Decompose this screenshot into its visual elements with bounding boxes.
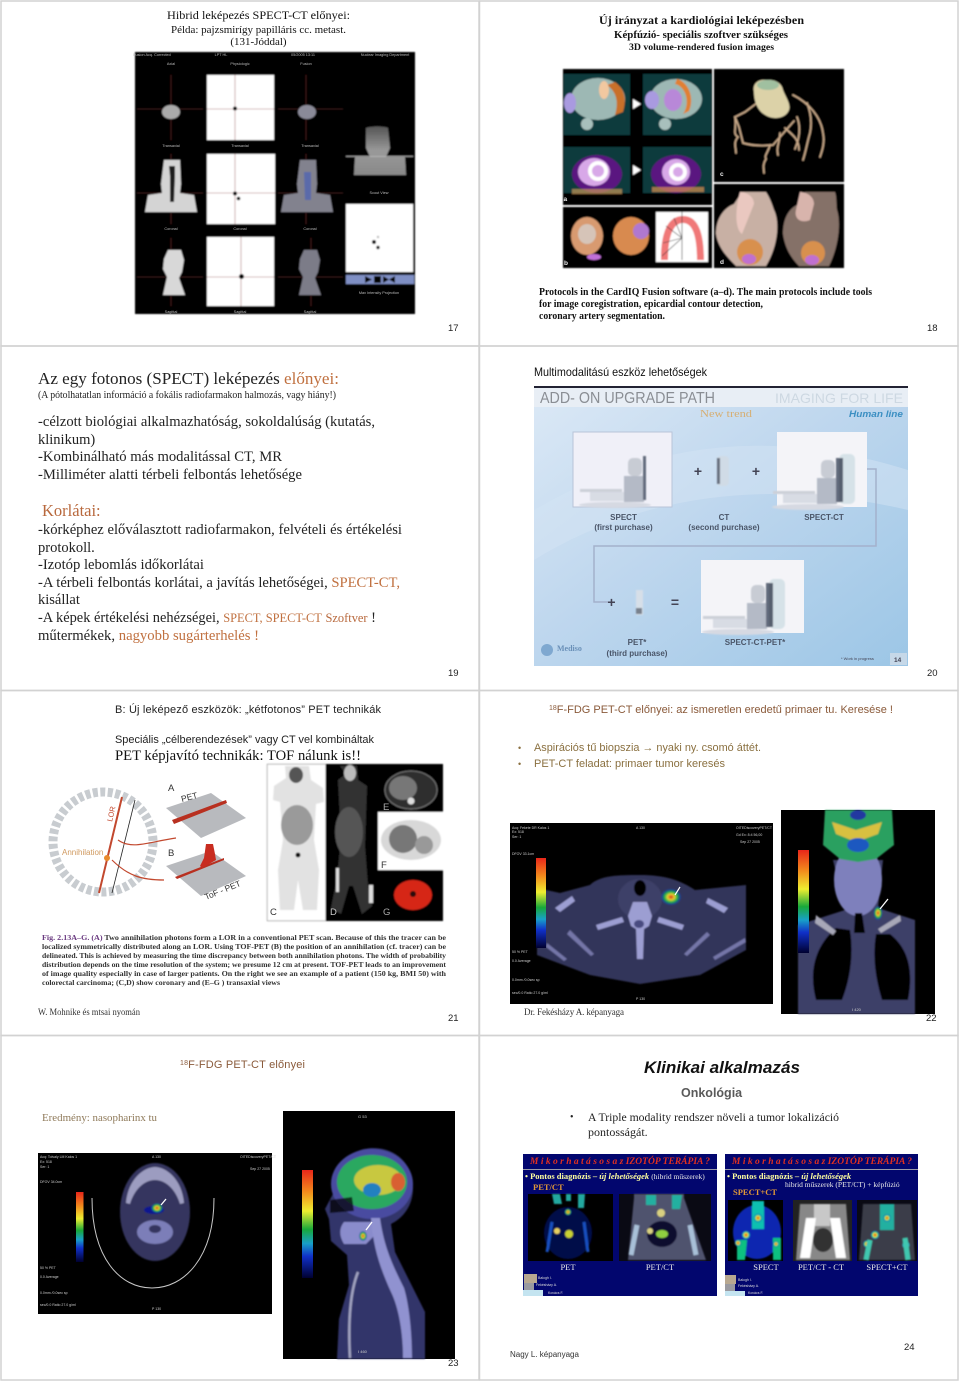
- caption: slide 18: [539, 287, 872, 322]
- image: axial head PET-CT: Acq: Tolvaly LM Kalos 1: [40, 1155, 77, 1159]
- image labels on screen: Scout View: [370, 191, 389, 195]
- slide image: PET/CT therapy: PET/CT: [646, 1262, 675, 1272]
- page number 18: 18: [927, 323, 938, 334]
- page number 17: 17: [448, 323, 459, 334]
- product labels: (first purchase): [594, 523, 653, 532]
- product labels: SPECT: [610, 513, 637, 522]
- slide image: PET/CT therapy: PET: [560, 1262, 576, 1272]
- image labels on screen: Coronal: [233, 227, 247, 231]
- plus and equals signs: [607, 463, 760, 610]
- image: fusion panels: [563, 69, 844, 268]
- text block: limitations: protokoll.: [38, 540, 95, 556]
- result text: Eredmény: nasopharinx tu: [42, 1112, 157, 1124]
- image: add-on upgrade path: IMAGING FOR LIFE: [775, 390, 903, 406]
- image labels on screen: Transaxial: [301, 144, 319, 148]
- bullet text: A Triple modality rendszer növeli a tumor lokalizáció: [588, 1110, 839, 1124]
- panel: slide 22 FDG PET-CT: [510, 704, 937, 1024]
- image labels on screen: Coronal: [164, 227, 178, 231]
- image labels on screen: Coronal: [303, 227, 317, 231]
- heading: slide 20: Multimodalitású eszköz lehetőségek: [534, 365, 708, 379]
- header labels: ADD- ON UPGRADE PATH: [540, 390, 715, 407]
- image labels on screen: Sagittal: [304, 310, 316, 314]
- page number 22: 22: [926, 1013, 937, 1024]
- image: add-on upgrade path: New trend: [700, 409, 753, 420]
- image: axial head PET-CT: [38, 1153, 277, 1314]
- image: axial PET-CT neck: DFOV 33.1cm: [512, 852, 534, 856]
- image: axial PET-CT neck: Ex: 518: [512, 830, 524, 834]
- heading: slide 18: 3D volume-rendered fusion images: [629, 43, 774, 53]
- subheading: TOF: PET képjavító technikák: TOF nálunk is!!: [115, 748, 361, 764]
- product boxes: [573, 432, 672, 507]
- panel letters: a: [564, 196, 568, 203]
- image labels on screen: Nuclear Imaging Department: [361, 53, 410, 57]
- plus and equals signs: +: [752, 463, 760, 479]
- panel d: [716, 192, 839, 266]
- heading: slide 18: Képfúzió- speciális szoftver szükséges: [614, 30, 788, 41]
- image: SPECT-CT screen: [135, 52, 415, 314]
- image: axial PET-CT neck: 50 % PET: [512, 950, 529, 954]
- diagram: TOF-PET ring: ToF - PET: [203, 878, 242, 902]
- image: sagittal head PET-CT: I 460: [358, 1349, 368, 1354]
- transversal slices: [162, 105, 180, 119]
- bullet list: slide 22: [518, 742, 761, 770]
- image: axial head PET-CT: 0.0 Average: [40, 1275, 59, 1279]
- image labels on screen: Axial: [167, 62, 175, 66]
- source note: slide 21: W. Mohnike és mtsai nyomán: [38, 1007, 140, 1017]
- image labels on screen: Max Intensity Projection: [359, 291, 399, 295]
- bullet list: slide 22: •: [518, 759, 521, 769]
- image labels on screen: Transaxial: [162, 144, 180, 148]
- heading: slide 22: F-FDG PET-CT előnyei: az ismeretlen eredetű primaer tu. Keresése !: [557, 704, 893, 716]
- source note: slide 22: Dr. Fekésházy A. képanyaga: [524, 1007, 624, 1017]
- image: axial PET-CT neck: Acq: Fekete DR Kalos 1: [512, 826, 549, 830]
- slide image: PET/CT therapy: [523, 1154, 717, 1296]
- heading: slide 21: B: Új leképező eszközök: „kétfotonos” PET technikák: [115, 703, 382, 716]
- bullet list: slide 22: Aspirációs tű biopszia → nyaki ny. csomó áttét.: [534, 742, 761, 754]
- subheading: slide 21: Speciális „célberendezések” vagy CT vel kombináltak: [115, 734, 374, 746]
- caption: figure 2.13: distribution depends on the time resolution of the system; we presume 12 cm at present. TOF-PET leads to an improvement: [42, 960, 447, 969]
- slide image: PET/CT therapy: • Pontos diagnózis – új lehetőségek (hibrid műszerek): [525, 1171, 705, 1181]
- heading: slide 23: 18: [180, 1060, 188, 1067]
- slide image: SPECT+CT therapy: SPECT: [753, 1262, 780, 1272]
- image: coronal PET-CT: [781, 810, 935, 1014]
- text block: limitations: kisállat: [38, 592, 80, 608]
- image: axial head PET-CT: 50 % PET: [40, 1266, 57, 1270]
- image: axial head PET-CT: Sep 27 2005: [250, 1167, 270, 1171]
- slide image: SPECT+CT therapy: M i k o r h a t á s o s a z IZOTÓP TERÁPIA ?: [731, 1155, 912, 1167]
- heading: slide 24: Klinikai alkalmazás: [644, 1058, 800, 1077]
- bullet list: slide 22: PET-CT feladat: primaer tumor keresés: [534, 758, 725, 770]
- text block: limitations: -Izotóp lebomlás időkorlátai: [38, 557, 204, 573]
- image letters: D: [330, 907, 337, 918]
- diagram: TOF-PET ring: B: [168, 848, 174, 859]
- panel: slide 24 clinical use: [510, 1058, 918, 1359]
- image: axial PET-CT neck: Sep 27 2005: [740, 840, 760, 844]
- image: axial PET-CT neck: P 130: [636, 997, 645, 1001]
- image letters: [270, 802, 390, 918]
- caption: slide 18: for image coregistration, epicardial contour detection,: [539, 299, 763, 310]
- caption: figure 2.13: of image quality especially in case of larger patients. On the right we see an example of a patient (150 kg, BMI 50) with: [42, 969, 447, 978]
- page number 23: 23: [448, 1358, 459, 1369]
- slide image: SPECT+CT therapy: SPECT+CT: [733, 1187, 777, 1197]
- bullet text: pontosságát.: [588, 1125, 648, 1139]
- plus and equals signs: =: [671, 594, 679, 610]
- panel: slide 18 cardiology: [539, 13, 938, 334]
- panel a: [564, 74, 711, 194]
- image: add-on upgrade path: Human line: [849, 409, 903, 419]
- page number 20: 20: [927, 668, 938, 679]
- text block: limitations: műtermékek, nagyobb sugárterhelés !: [38, 628, 259, 644]
- heading: slide 17: (131-Jóddal): [230, 36, 287, 48]
- product labels: (third purchase): [607, 649, 668, 658]
- diagram: TOF-PET ring: Annihilation: [62, 848, 103, 857]
- panel: slide 20 multimodality: [534, 365, 938, 679]
- slide image: PET/CT therapy: M i k o r h a t á s o s a z IZOTÓP TERÁPIA ?: [529, 1155, 710, 1167]
- subheading: oncology: Onkológia: [681, 1086, 743, 1100]
- image labels on screen: Fusion: [300, 62, 312, 66]
- image letters: G: [383, 907, 390, 918]
- image: axial head PET-CT: Ex: 518: [40, 1160, 52, 1164]
- image: axial PET-CT neck: OITEDiscoveryPET/CT: [736, 826, 773, 830]
- logo: Mediso: [541, 644, 582, 656]
- panel letters: c: [720, 171, 724, 178]
- caption: figure 2.13: [42, 933, 447, 987]
- coronal slices: [145, 160, 197, 212]
- heading: slide 22: 18: [549, 705, 557, 712]
- image labels on screen: 05/2005 13:11: [291, 53, 315, 57]
- text block: advantages: klinikum): [38, 432, 95, 448]
- slide image: SPECT+CT therapy: SPECT+CT: [866, 1262, 908, 1272]
- slide image: SPECT+CT therapy: Balogh I.: [738, 1278, 752, 1282]
- diagram: TOF-PET ring: A: [168, 783, 175, 794]
- image labels on screen: LPT HL: [215, 53, 227, 57]
- image: axial head PET-CT: DFOV 34.0cm: [40, 1180, 62, 1184]
- slide image: PET/CT therapy: Balogh I.: [538, 1276, 552, 1280]
- product labels: CT: [719, 513, 729, 522]
- frontal scout view: [354, 126, 406, 175]
- bullet text: •: [570, 1112, 574, 1123]
- image labels on screen: Transaxial: [231, 144, 249, 148]
- slide image: PET/CT therapy: Fekésházy A.: [536, 1283, 557, 1287]
- caption: figure 2.13: localized symmetrically distributed along an LOR. Using TOF-PET (B) the position of an annihilation (cf. tracer) can be: [42, 942, 447, 951]
- caption: figure 2.13: colorectal carcinoma; (C,D) show coronary and (E–G ) transaxial views: [42, 978, 280, 987]
- sagittal slices: [163, 250, 185, 295]
- panel letters: d: [720, 259, 724, 266]
- heading: slide 18: Új irányzat a kardiológiai leképezésben: [599, 13, 804, 27]
- bullet list: slide 22: •: [518, 743, 521, 753]
- footnote and slide number: 14: [894, 657, 902, 664]
- image labels on screen: Fusion Acq. Corrected: [133, 53, 171, 57]
- panel letters: [564, 171, 724, 267]
- image: axial PET-CT neck: sec/0.0 Ratio 27.0 g/ml: [512, 991, 548, 995]
- diagram: TOF-PET ring: [53, 783, 246, 902]
- image labels on screen: [133, 53, 410, 314]
- image labels on screen: Sagittal: [234, 310, 246, 314]
- image labels on screen: Physiologic: [230, 62, 250, 66]
- diagram: TOF-PET ring: LOR: [105, 805, 118, 822]
- source note: slide 24: Nagy L. képanyaga: [510, 1350, 579, 1359]
- image letters: F: [381, 860, 387, 871]
- page number 21: 21: [448, 1013, 459, 1024]
- panel c: coronary tree: [735, 95, 824, 173]
- slide image: SPECT+CT therapy: [725, 1154, 918, 1296]
- heading: slide 17: Hibrid leképezés SPECT-CT előnyei:: [167, 8, 350, 22]
- slide image: SPECT+CT therapy: • Pontos diagnózis – új lehetőségek: [727, 1171, 852, 1181]
- connector arrow: [594, 469, 876, 602]
- image: axial head PET-CT: sec/0.0 Ratio 27.0 g/ml: [40, 1303, 76, 1307]
- heading: slide 19: Az egy fotonos (SPECT) leképezés előnyei:: [38, 369, 339, 388]
- panel: slide 21 PET improvements: [38, 703, 459, 1024]
- page number 24: 24: [904, 1342, 915, 1353]
- image: axial PET-CT neck: 0.0 Average: [512, 959, 531, 963]
- text block: limitations: -A képek értékelési nehézségei, SPECT, SPECT-CT Szoftver !: [38, 610, 376, 626]
- product labels: SPECT-CT: [804, 513, 844, 522]
- image: axial PET-CT neck: A 130: [636, 826, 645, 830]
- image: axial head PET-CT: Ser: 1: [40, 1165, 49, 1169]
- image letters: C: [270, 907, 277, 918]
- text block: limitations: [38, 522, 402, 644]
- image: axial PET-CT neck: 0.0mm /0.0sec sp: [512, 978, 540, 982]
- slide image: SPECT+CT therapy: PET/CT - CT: [798, 1262, 845, 1272]
- text block: advantages: [38, 414, 375, 483]
- slide image: PET/CT therapy: PET/CT: [533, 1182, 564, 1192]
- panel: slide 19 SPECT advantages: [38, 369, 459, 679]
- panel b: [571, 212, 708, 262]
- caption: figure 2.13: Fig. 2.13A–G. (A) Two annihilation photons form a LOR in a conventional PET scan. Because of this the tracer can be: [42, 933, 447, 942]
- image: axial head PET-CT: OITEDiscoveryPET/CT: [240, 1155, 277, 1159]
- image labels on screen: Sagittal: [165, 310, 177, 314]
- product labels: (second purchase): [688, 523, 760, 532]
- footnote and slide number: [841, 653, 907, 665]
- product labels: PET*: [628, 638, 647, 647]
- panel: slide 17 hybrid SPECT-CT: [133, 8, 459, 334]
- logo: Mediso: Mediso: [557, 644, 582, 653]
- heading: slide 17: Példa: pajzsmirígy papilláris cc. metast.: [171, 24, 346, 36]
- image letters: E: [383, 802, 389, 813]
- heading: limitations: Korlátai:: [42, 501, 101, 520]
- image: axial PET-CT neck: [510, 823, 773, 1004]
- text block: limitations: -kórképhez előválasztott radiofarmakon, felvételi és értékelési: [38, 522, 402, 538]
- subheading: slide 19: (A pótolhatatlan információ a fokális radiofarmakon halmozás, vagy hiány!): [38, 390, 336, 401]
- diagram: TOF-PET ring: PET: [180, 790, 198, 804]
- product labels: [594, 513, 844, 658]
- slide image: PET/CT therapy: Kovács F.: [548, 1291, 563, 1295]
- caption: slide 18: coronary artery segmentation.: [539, 311, 665, 322]
- image: axial head PET-CT: 0.0mm /0.0sec sp: [40, 1291, 68, 1295]
- caption: slide 18: Protocols in the CardIQ Fusion software (a–d). The main protocols include tools: [539, 287, 872, 298]
- image: whole-body scans: [267, 764, 443, 921]
- image: axial PET-CT neck: Gd Ex: 8:4 56,00: [736, 833, 762, 837]
- plus and equals signs: +: [607, 594, 616, 610]
- page number 19: 19: [448, 668, 459, 679]
- text block: advantages: -célzott biológiai alkalmazhatóság, sokoldalúság (kutatás,: [38, 414, 375, 430]
- text block: limitations: -A térbeli felbontás korlátai, a javítás lehetőségei, SPECT-CT,: [38, 575, 400, 591]
- product labels: SPECT-CT-PET*: [725, 638, 786, 647]
- caption: figure 2.13: delineated. This is achieved by measuring the time discrepancy between both annihilation photons. The width of probability: [42, 951, 446, 960]
- heading: slide 18: [599, 13, 804, 53]
- text block: advantages: -Kombinálható más modalitással CT, MR: [38, 449, 282, 465]
- text block: advantages: -Milliméter alatti térbeli felbontás lehetősége: [38, 467, 302, 483]
- panel letters: b: [564, 260, 568, 267]
- heading: slide 17: [167, 8, 350, 48]
- slide image: SPECT+CT therapy: hibrid műszerek (PET/CT) + képfúzió: [785, 1180, 900, 1189]
- image: sagittal head PET-CT: [283, 1111, 455, 1359]
- heading: slide 23: F-FDG PET-CT előnyei: [188, 1059, 305, 1071]
- image: axial head PET-CT: A 130: [152, 1155, 161, 1159]
- plus and equals signs: +: [694, 463, 702, 479]
- slide image: SPECT+CT therapy: Fekésházy A.: [738, 1284, 759, 1288]
- slide image: SPECT+CT therapy: Kovács F.: [748, 1291, 763, 1295]
- image: sagittal head PET-CT: G 53: [358, 1114, 367, 1119]
- footnote and slide number: * Work in progress: [841, 656, 874, 661]
- toolbar: [346, 275, 414, 284]
- image: axial PET-CT neck: Ser: 1: [512, 835, 521, 839]
- image: coronal PET-CT: I 420: [852, 1007, 862, 1012]
- panel: slide 23 nasopharynx result: [38, 1059, 459, 1369]
- bullet text: [570, 1110, 839, 1139]
- image: axial head PET-CT: P 130: [152, 1307, 161, 1311]
- image: add-on upgrade path: [534, 386, 908, 666]
